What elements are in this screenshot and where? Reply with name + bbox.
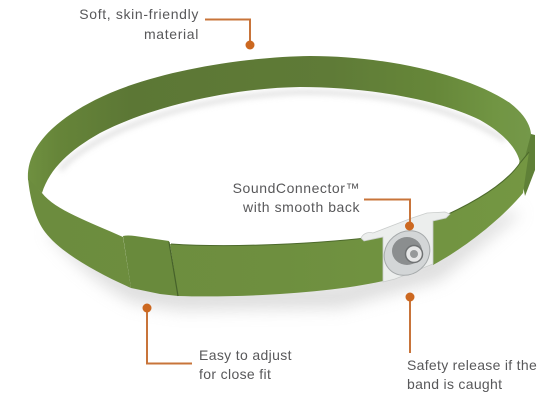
label: soft material: material bbox=[144, 26, 199, 42]
label: adjust bbox=[199, 347, 292, 382]
label: connector: SoundConnector™ bbox=[233, 180, 360, 196]
band shadow bbox=[48, 212, 522, 310]
band: right front segment bbox=[433, 152, 529, 265]
band: right loop bbox=[519, 132, 535, 196]
connector: inner ring bbox=[392, 237, 422, 265]
leader: soft material bbox=[205, 20, 254, 50]
label: connector bbox=[233, 180, 360, 215]
band: loop edge bbox=[169, 242, 178, 296]
band: right top edge shade bbox=[433, 152, 529, 221]
leader: adjust bbox=[142, 304, 192, 364]
connector: hole bbox=[410, 250, 418, 258]
band: left front segment bbox=[28, 178, 131, 288]
leader: safety release bbox=[406, 292, 414, 353]
label: soft material bbox=[79, 6, 199, 42]
label: safety release: band is caught bbox=[407, 376, 502, 392]
band: sliding loop bbox=[123, 236, 178, 296]
inner shadow under back arc bbox=[60, 92, 505, 170]
label: adjust: Easy to adjust bbox=[199, 347, 292, 363]
leader: connector bbox=[364, 200, 414, 230]
connector: core bbox=[406, 246, 422, 262]
label: connector: with smooth back bbox=[243, 199, 360, 215]
label: safety release bbox=[407, 357, 537, 392]
label: safety release: Safety release if the bbox=[407, 357, 537, 373]
band: top edge shade bbox=[171, 236, 383, 246]
connector: disc bbox=[375, 221, 439, 285]
band: main front segment bbox=[170, 236, 383, 296]
label: soft material: Soft, skin-friendly bbox=[79, 6, 199, 22]
label: adjust: for close fit bbox=[199, 366, 271, 382]
band: back arc bbox=[28, 56, 531, 193]
connector bbox=[361, 212, 450, 285]
connector: housing bbox=[361, 212, 450, 282]
